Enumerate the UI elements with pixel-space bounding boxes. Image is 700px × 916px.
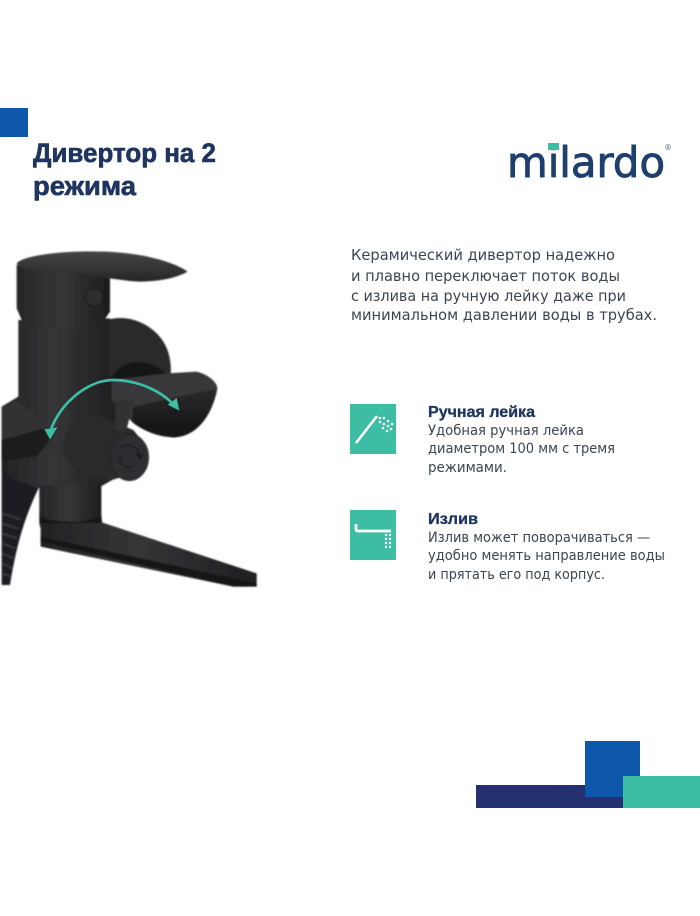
- title: [32, 138, 216, 201]
- wall flange: [107, 318, 171, 383]
- body: [2, 318, 115, 488]
- feature text: hand shower: режимами.: [428, 460, 507, 476]
- spout handle: [112, 372, 217, 437]
- hose: [2, 463, 40, 585]
- decorative blocks: [476, 741, 700, 808]
- feature text: hand shower: [428, 404, 615, 476]
- feature text: spout: и прятать его под корпус.: [428, 567, 605, 583]
- description text: минимальном давлении воды в трубах.: [351, 306, 657, 324]
- feature text: hand shower: диаметром 100 мм с тремя: [428, 441, 615, 457]
- neck: [39, 485, 101, 524]
- description text: Керамический дивертор надежно: [351, 246, 615, 264]
- feature text: spout: удобно менять направление воды: [428, 548, 665, 564]
- left pipe: [2, 401, 57, 462]
- arrow: rotation arc: [45, 380, 179, 439]
- feature text: spout: Излив: [428, 511, 478, 528]
- title: Дивертор на 2: [33, 138, 216, 168]
- feature text: spout: [428, 511, 665, 583]
- description text: с излива на ручную лейку даже при: [351, 287, 626, 305]
- feature text: hand shower: Удобная ручная лейка: [428, 423, 584, 439]
- corner square: [0, 108, 28, 137]
- icon: spout: [350, 510, 396, 560]
- faucet photo: [0, 250, 258, 588]
- icon: hand shower: [350, 404, 396, 454]
- diverter: [63, 415, 147, 481]
- spout: [41, 523, 257, 587]
- description text: и плавно переключает поток воды: [351, 267, 620, 285]
- logo: milardo: ®: [664, 143, 672, 152]
- feature text: hand shower: Ручная лейка: [428, 404, 535, 421]
- feature text: spout: Излив может поворачиваться —: [428, 530, 650, 546]
- lever cap: [17, 265, 110, 329]
- description text: [351, 246, 657, 324]
- title: режима: [33, 171, 136, 201]
- lever: [17, 251, 188, 282]
